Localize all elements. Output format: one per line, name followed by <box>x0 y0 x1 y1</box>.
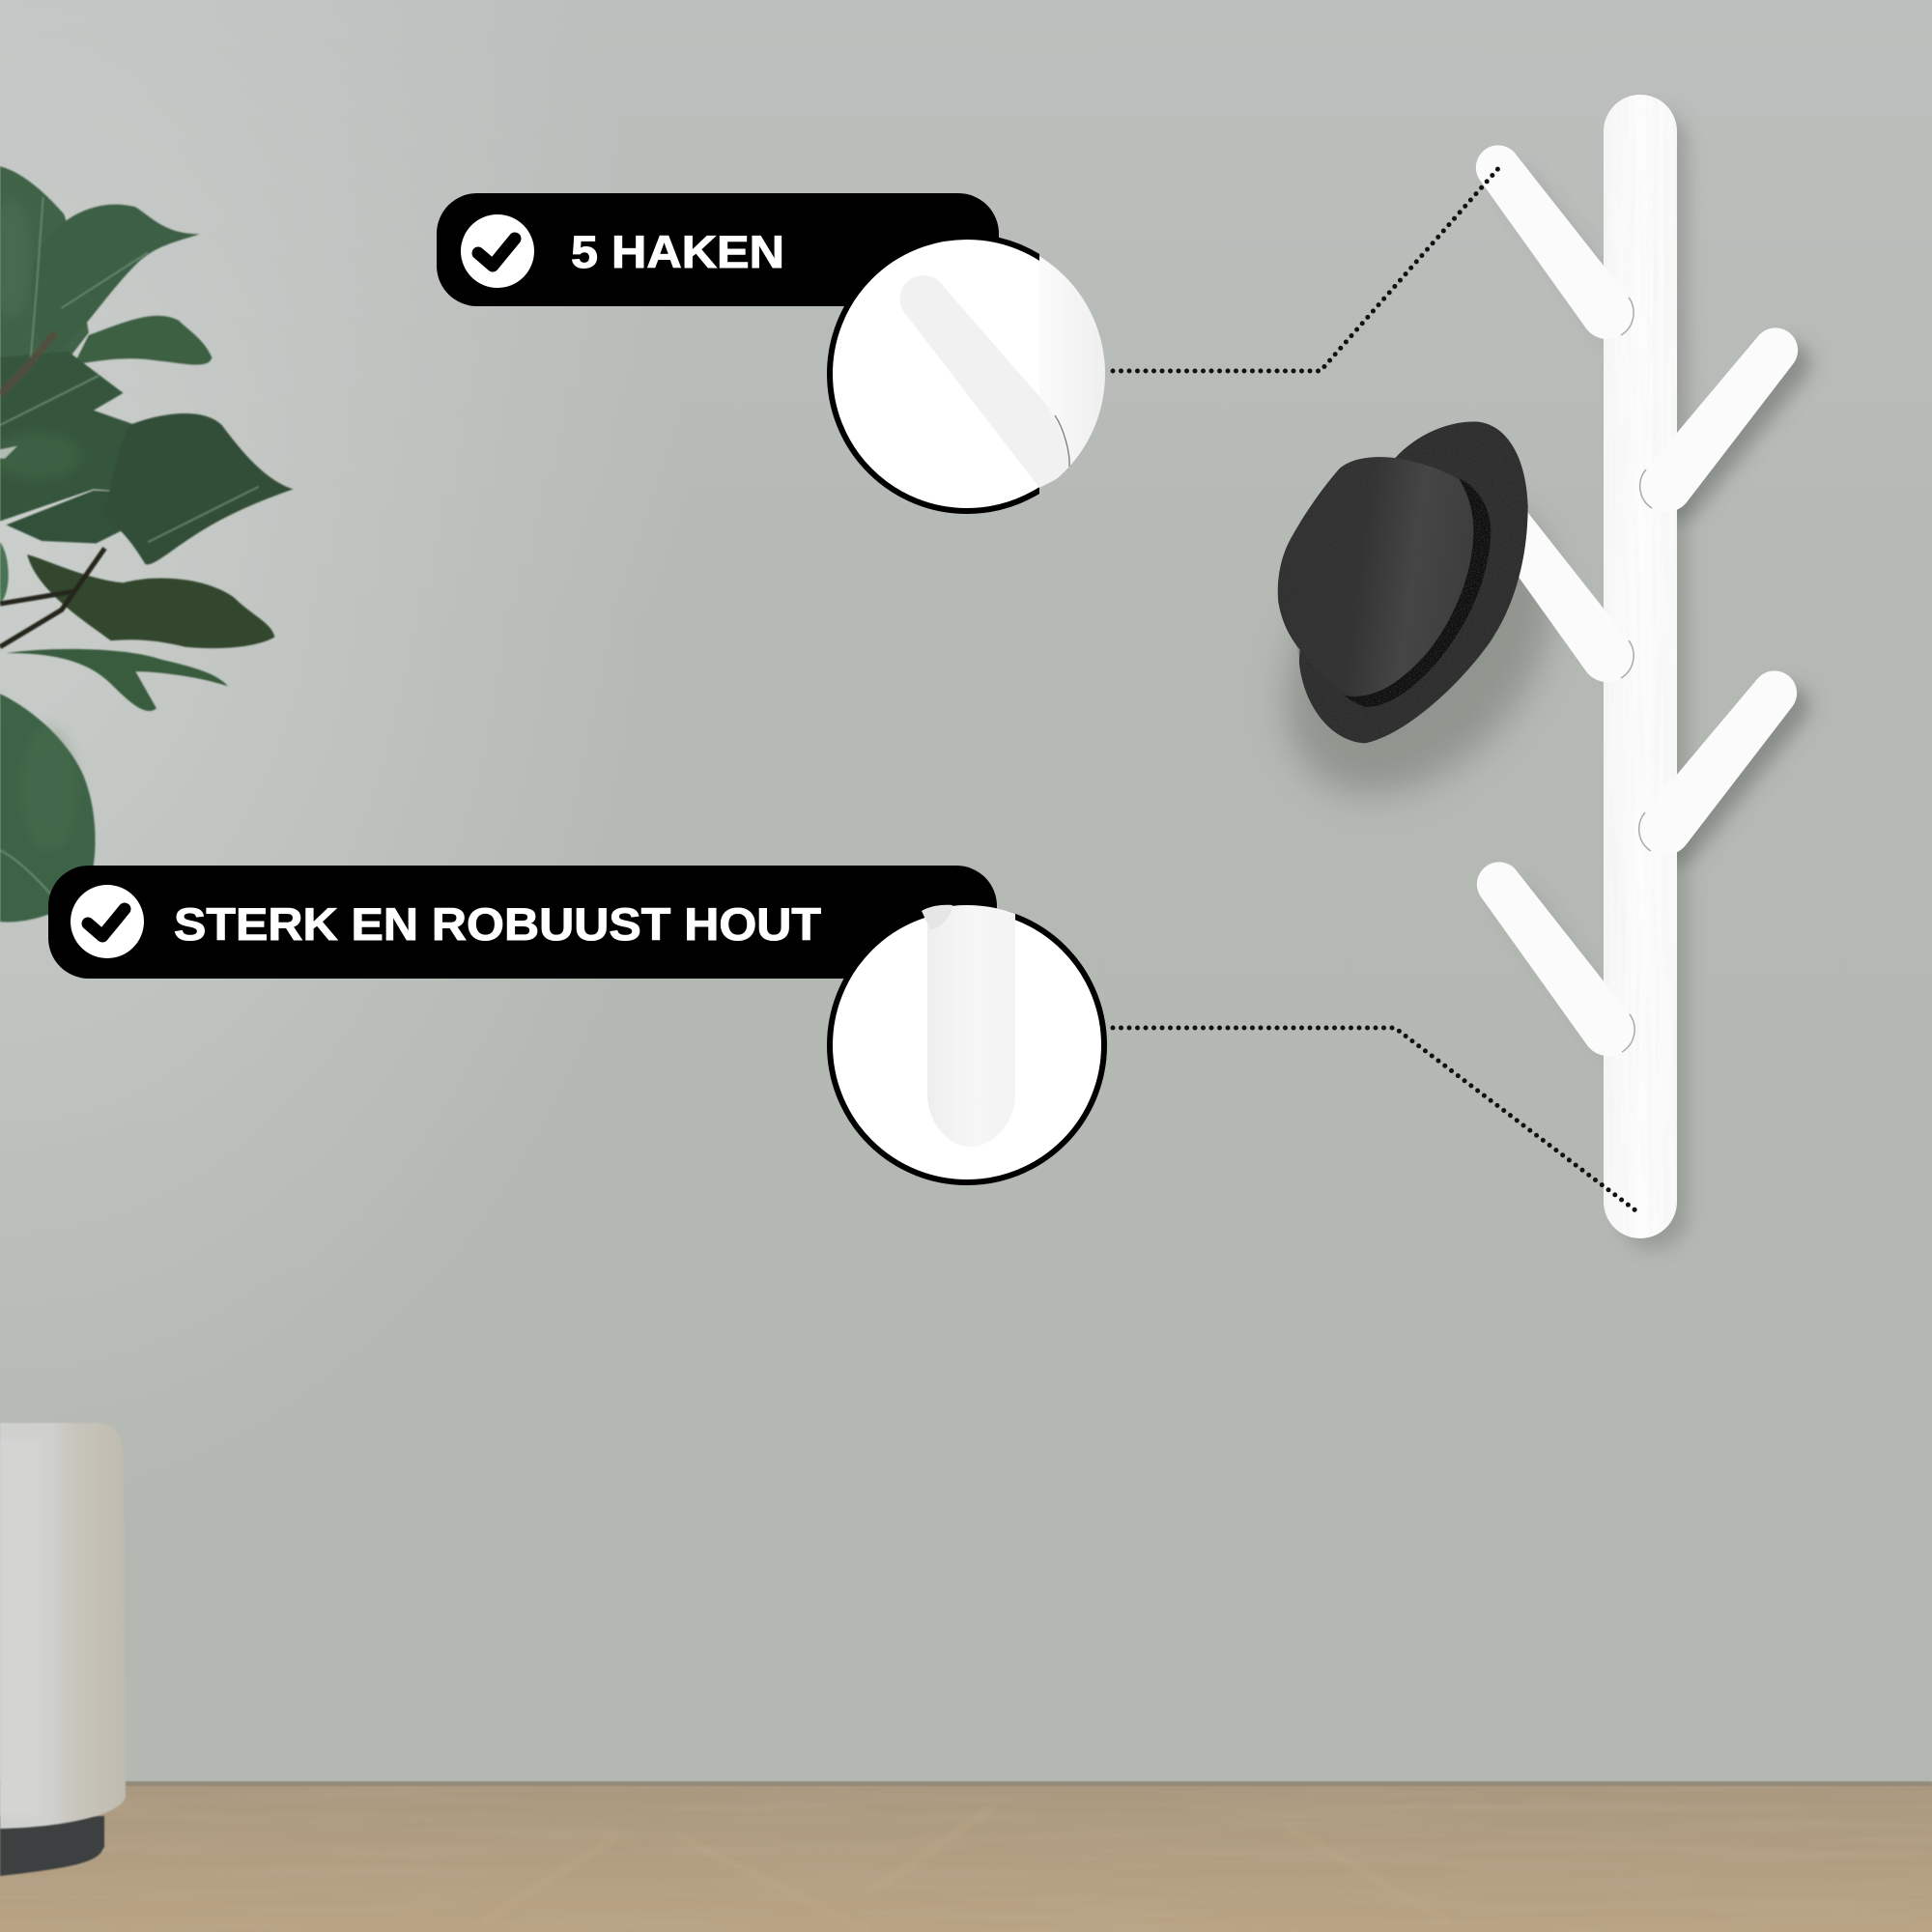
dotted leader line to hook <box>1113 165 1501 371</box>
rack trunk <box>1604 95 1677 1238</box>
hook 5 <box>1477 862 1634 1056</box>
dotted leader line to rack end <box>1113 1028 1639 1213</box>
icon: check circle <box>461 214 534 288</box>
hat brim <box>1299 422 1528 743</box>
hat shadow <box>1232 449 1608 845</box>
pill: sterk en robuust hout <box>48 866 997 979</box>
hat band <box>1345 478 1491 707</box>
hook 2 <box>1640 327 1798 512</box>
label: 5 haken: 5 HAKEN <box>571 226 784 277</box>
trunk section in circle <box>1039 256 1105 467</box>
icon: check circle <box>71 885 144 958</box>
hook 3 <box>1476 488 1634 682</box>
hook 1 <box>1476 145 1634 339</box>
hat crown <box>1278 457 1488 698</box>
label: sterk en robuust hout: STERK EN ROBUUST HOUT <box>174 898 821 950</box>
callout circle: hook detail <box>830 232 1111 511</box>
hat <box>1278 422 1528 743</box>
hat texture <box>1278 422 1528 743</box>
wooden floor <box>0 1781 1932 1932</box>
callout circle: rounded end detail <box>830 898 1104 1182</box>
plant leaves <box>0 166 294 922</box>
pill: 5 haken <box>437 193 999 306</box>
hook in circle <box>900 275 1069 488</box>
hook 4 <box>1639 670 1797 855</box>
coat rack <box>1476 95 1798 1238</box>
rack shadow <box>1520 145 1789 1215</box>
plant pot <box>0 1423 126 1876</box>
peg in circle <box>927 898 1015 1147</box>
